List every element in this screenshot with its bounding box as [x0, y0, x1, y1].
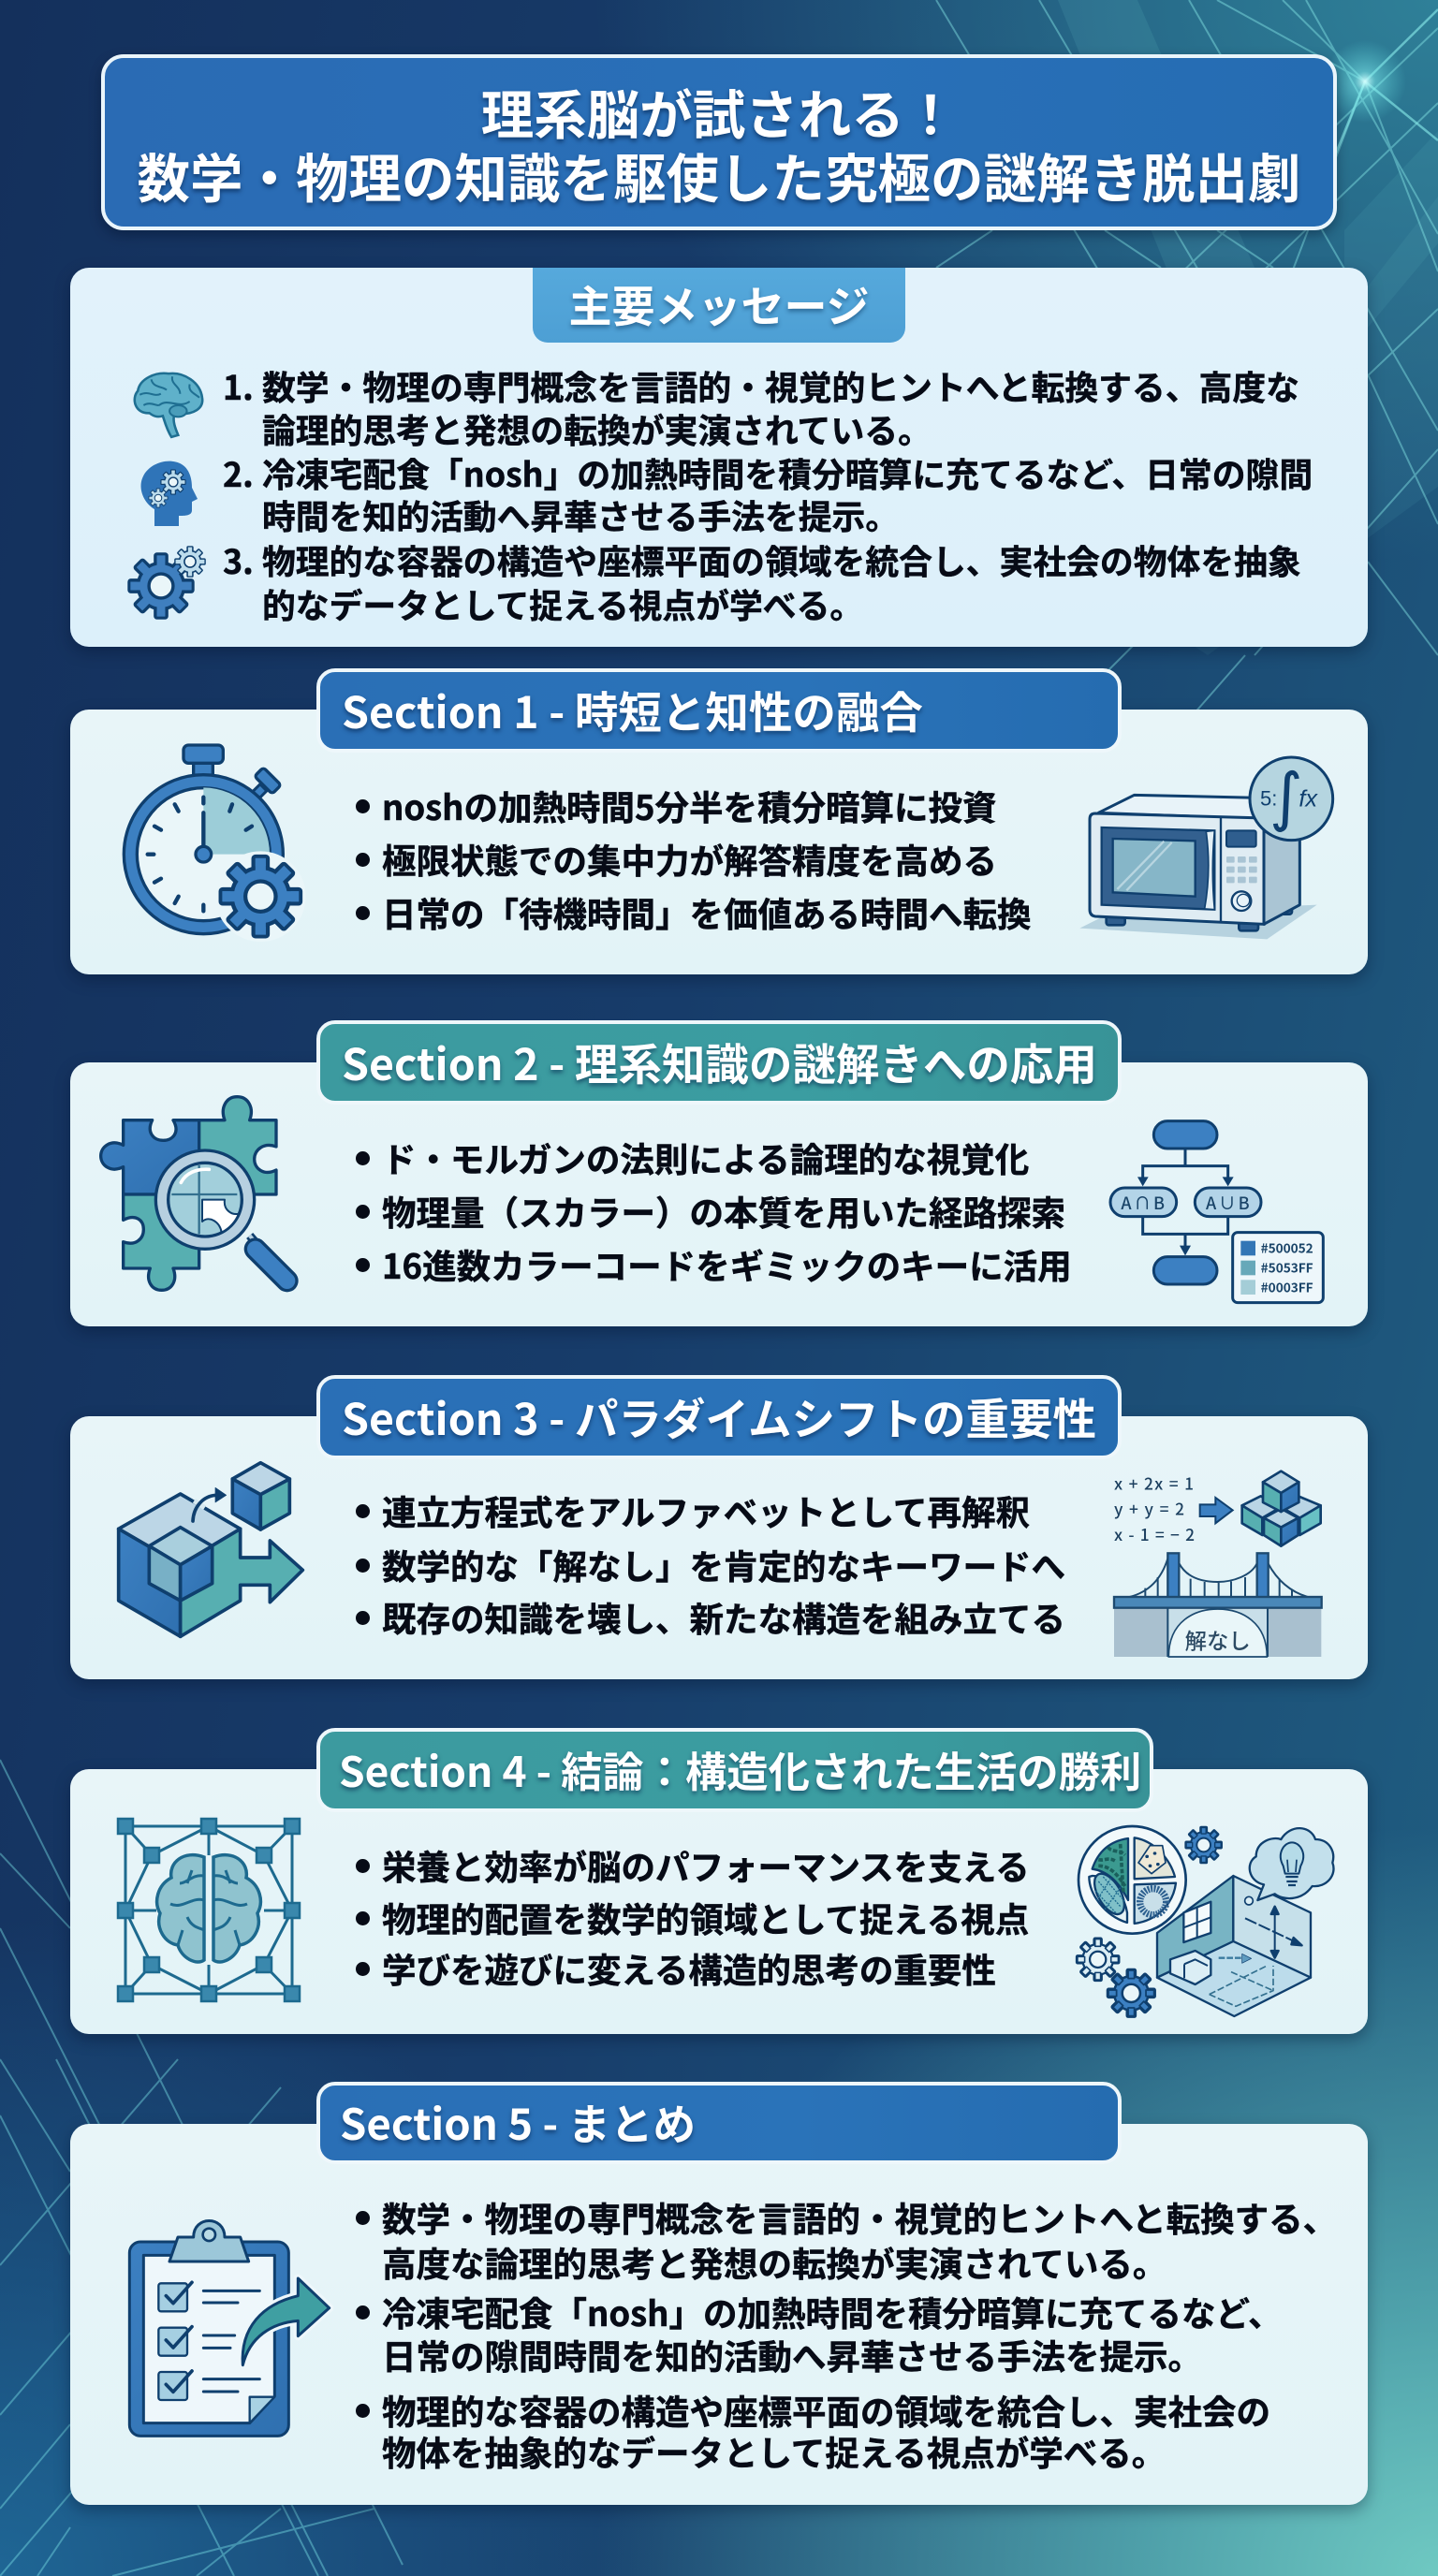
text: section 3 bullets — [356, 1486, 1065, 1642]
text: 物理的な容器の構造や座標平面の領域を統合し、実社会の — [382, 2385, 1270, 2435]
text: 栄養と効率が脳のパフォーマンスを支える — [382, 1840, 1030, 1890]
heading: section 2: Section 2 - 理系知識の謎解きへの応用 — [342, 1031, 1097, 1093]
text: 数学的な「解なし」を肯定的なキーワードへ — [382, 1540, 1065, 1589]
heading: section 2 — [316, 1020, 1122, 1105]
text: 学びを遊びに変える構造的思考の重要性 — [382, 1943, 996, 1993]
text: 物理的な容器の構造や座標平面の領域を統合し、実社会の物体を抽象 — [262, 535, 1301, 584]
icon: logic flowchart and colour codes — [1108, 1120, 1325, 1305]
text: section 4 bullets — [356, 1840, 1030, 1993]
panel: section 3 — [70, 1416, 1368, 1679]
icon: microwave with integral: fx — [1299, 785, 1318, 812]
heading: section 3 — [316, 1375, 1122, 1459]
icon: logic flowchart and colour codes: A∪B — [1206, 1191, 1250, 1215]
panel: section 1 — [70, 710, 1368, 974]
text: 物理的配置を数学的領域として捉える視点 — [382, 1893, 1029, 1942]
text: 極限状態での集中力が解答精度を高める — [382, 834, 997, 884]
text: 連立方程式をアルファベットとして再解釈 — [382, 1486, 1030, 1535]
title banner: 数学・物理の知識を駆使した究極の謎解き脱出劇 — [137, 137, 1301, 213]
icon: puzzle and magnifier — [99, 1095, 299, 1292]
text: section 1 bullets — [356, 781, 1032, 937]
panel: section 5 — [70, 2124, 1368, 2505]
icon: microwave with integral: 5: — [1260, 787, 1277, 811]
heading: section 5: Section 5 - まとめ — [340, 2091, 696, 2153]
icon: gears — [127, 546, 206, 620]
text: 高度な論理的思考と発想の転換が実演されている。 — [382, 2237, 1167, 2287]
text: 2. — [223, 448, 254, 497]
text: 既存の知識を壊し、新たな構造を組み立てる — [382, 1592, 1065, 1642]
text: 日常の「待機時間」を価値ある時間へ転換 — [382, 887, 1032, 937]
panel: key messages — [70, 268, 1368, 647]
key messages heading — [533, 268, 905, 343]
title banner: 理系脳が試される！ — [481, 73, 957, 150]
icon: cubes and arrow — [116, 1460, 305, 1638]
icon: microwave with integral — [1080, 756, 1335, 940]
icon: brain in network — [116, 1818, 301, 2003]
panel: section 4 — [70, 1769, 1368, 2034]
text: 数学・物理の専門概念を言語的・視覚的ヒントへと転換する、 — [382, 2192, 1337, 2242]
text: 16進数カラーコードをギミックのキーに活用 — [382, 1239, 1072, 1289]
text: key message list — [223, 361, 1313, 628]
heading: section 1 — [316, 668, 1122, 753]
icon: equations, cubes and bridge: y + y = 2 — [1114, 1496, 1184, 1519]
text: 数学・物理の専門概念を言語的・視覚的ヒントへと転換する、高度な — [262, 361, 1299, 410]
icon: logic flowchart and colour codes: #500052 — [1261, 1238, 1313, 1257]
icon: equations, cubes and bridge: 解なし — [1185, 1624, 1251, 1656]
heading: section 5 — [316, 2082, 1122, 2164]
text: 論理的思考と発想の転換が実演されている。 — [262, 404, 932, 453]
icon: head with gears — [140, 461, 198, 526]
text: section 2 bullets — [356, 1133, 1072, 1289]
icon: equations, cubes and bridge: x - 1 = − 2 — [1114, 1522, 1195, 1545]
heading: section 4 — [316, 1728, 1153, 1812]
text: 物理量（スカラー）の本質を用いた経路探索 — [382, 1186, 1065, 1236]
icon: equations, cubes and bridge: x + 2x = 1 — [1114, 1471, 1194, 1495]
text: 日常の隙間時間を知的活動へ昇華させる手法を提示。 — [382, 2330, 1202, 2379]
decorative defs — [0, 0, 5, 5]
text: 冷凍宅配食「nosh」の加熱時間を積分暗算に充てるなど、日常の隙間 — [262, 448, 1313, 497]
icon: logic flowchart and colour codes: #0003FF — [1261, 1277, 1313, 1295]
text: 物体を抽象的なデータとして捉える視点が学べる。 — [382, 2426, 1166, 2476]
icon: clipboard with arrow — [127, 2219, 333, 2437]
icon: microwave with integral: ∫ — [1269, 761, 1303, 835]
text: 3. — [223, 535, 254, 584]
title banner — [101, 54, 1337, 230]
icon: logic flowchart and colour codes: #5053FF — [1261, 1258, 1313, 1277]
text: section 5 bullets — [356, 2192, 1337, 2476]
icon: stopwatch with gear — [122, 743, 303, 938]
key messages heading: 主要メッセージ — [568, 273, 870, 335]
heading: section 1: Section 1 - 時短と知性の融合 — [342, 679, 923, 741]
text: 1. — [223, 361, 254, 410]
icon: brain — [133, 373, 204, 438]
text: 冷凍宅配食「nosh」の加熱時間を積分暗算に充てるなど、 — [382, 2287, 1283, 2336]
icon: equations, cubes and bridge — [1112, 1470, 1323, 1658]
icon: logic flowchart and colour codes: A∩B — [1121, 1191, 1165, 1215]
text: 時間を知的活動へ昇華させる手法を提示。 — [262, 490, 899, 539]
text: noshの加熱時間5分半を積分暗算に投資 — [382, 781, 997, 830]
text: 的なデータとして捉える視点が学べる。 — [262, 579, 863, 628]
text: ド・モルガンの法則による論理的な視覚化 — [382, 1133, 1029, 1182]
icon: meal plate, room and gears — [1075, 1825, 1335, 2018]
heading: section 4: Section 4 - 結論：構造化された生活の勝利 — [339, 1739, 1141, 1799]
panel: section 2 — [70, 1062, 1368, 1326]
heading: section 3: Section 3 - パラダイムシフトの重要性 — [342, 1385, 1096, 1448]
